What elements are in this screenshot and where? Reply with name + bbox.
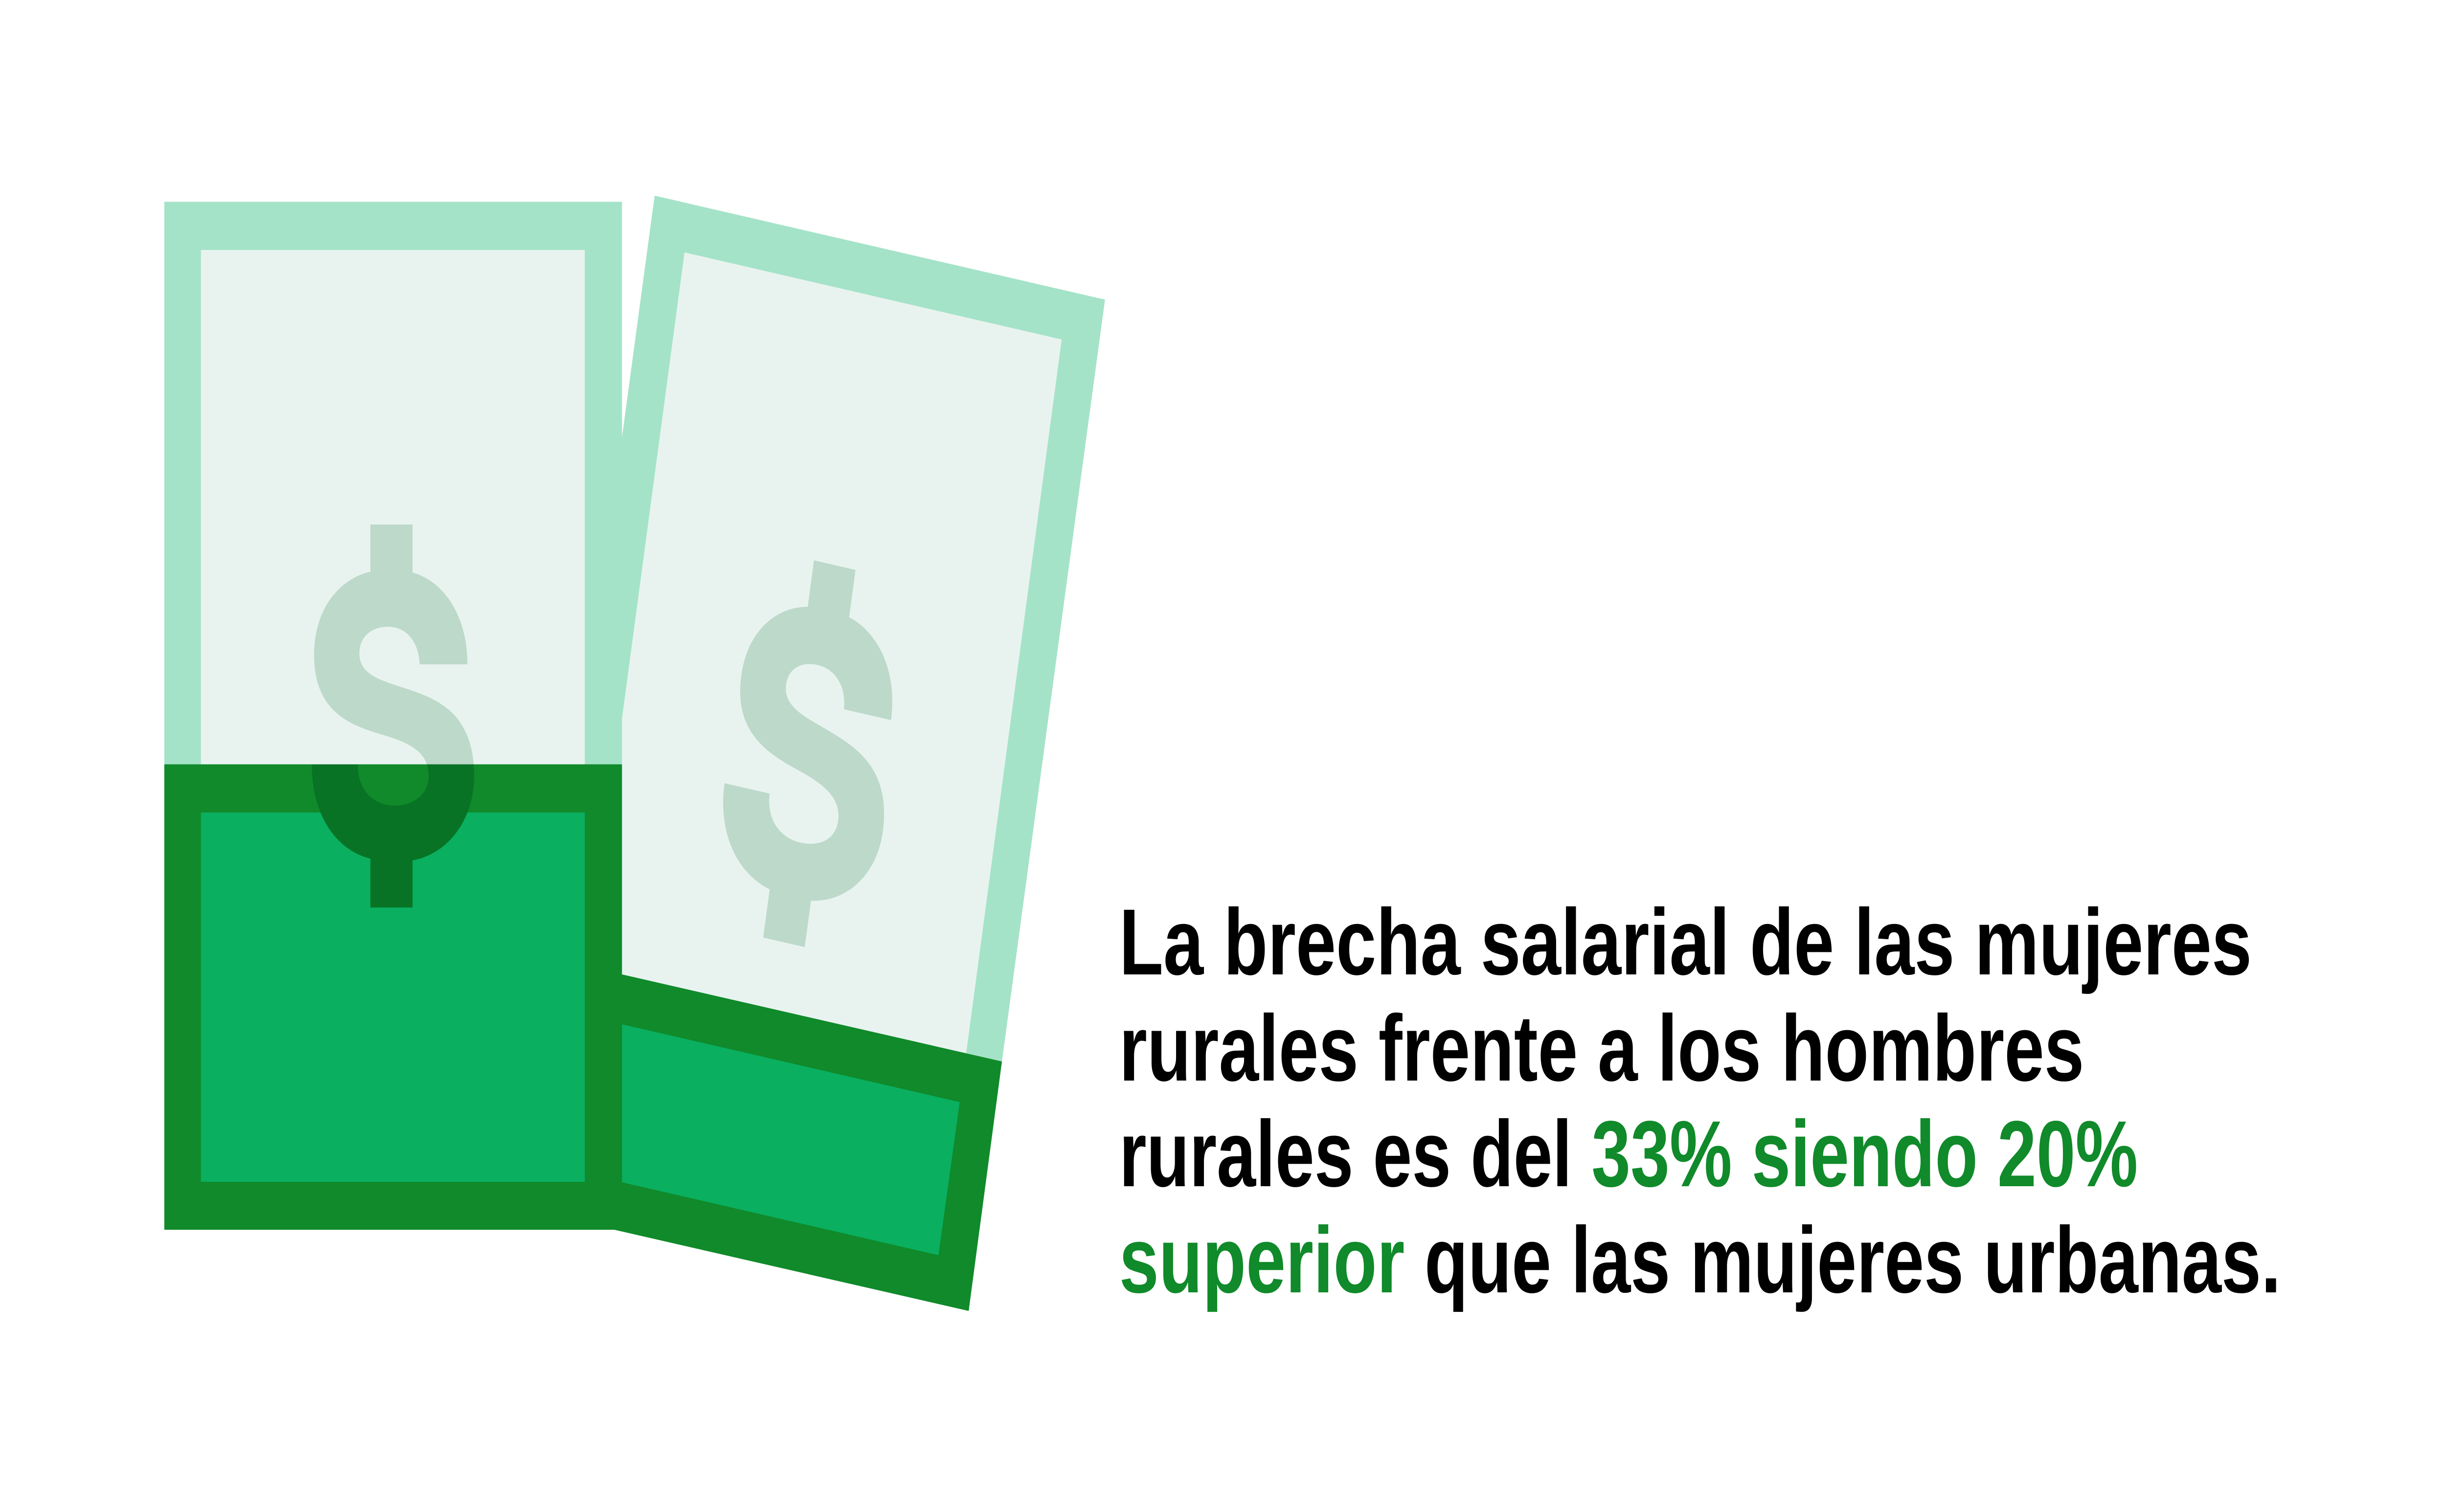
illustration: two banknotes <box>164 196 1105 1311</box>
text block: wage gap statement <box>1119 890 2281 1313</box>
icon: front banknote <box>164 202 622 1230</box>
text block: wage gap statement: rurales frente a los hombres <box>1119 996 2084 1101</box>
icon: dollar sign on front banknote <box>312 524 474 907</box>
icon: tilted banknote <box>614 196 1105 1311</box>
text block: wage gap statement: superior que las mujeres urbanas. <box>1119 1208 2281 1313</box>
icon: dollar sign on tilted banknote <box>705 547 916 961</box>
text block: wage gap statement: rurales es del 33% siendo 20% <box>1119 1102 2138 1207</box>
text block: wage gap statement: La brecha salarial de las mujeres <box>1119 890 2252 995</box>
